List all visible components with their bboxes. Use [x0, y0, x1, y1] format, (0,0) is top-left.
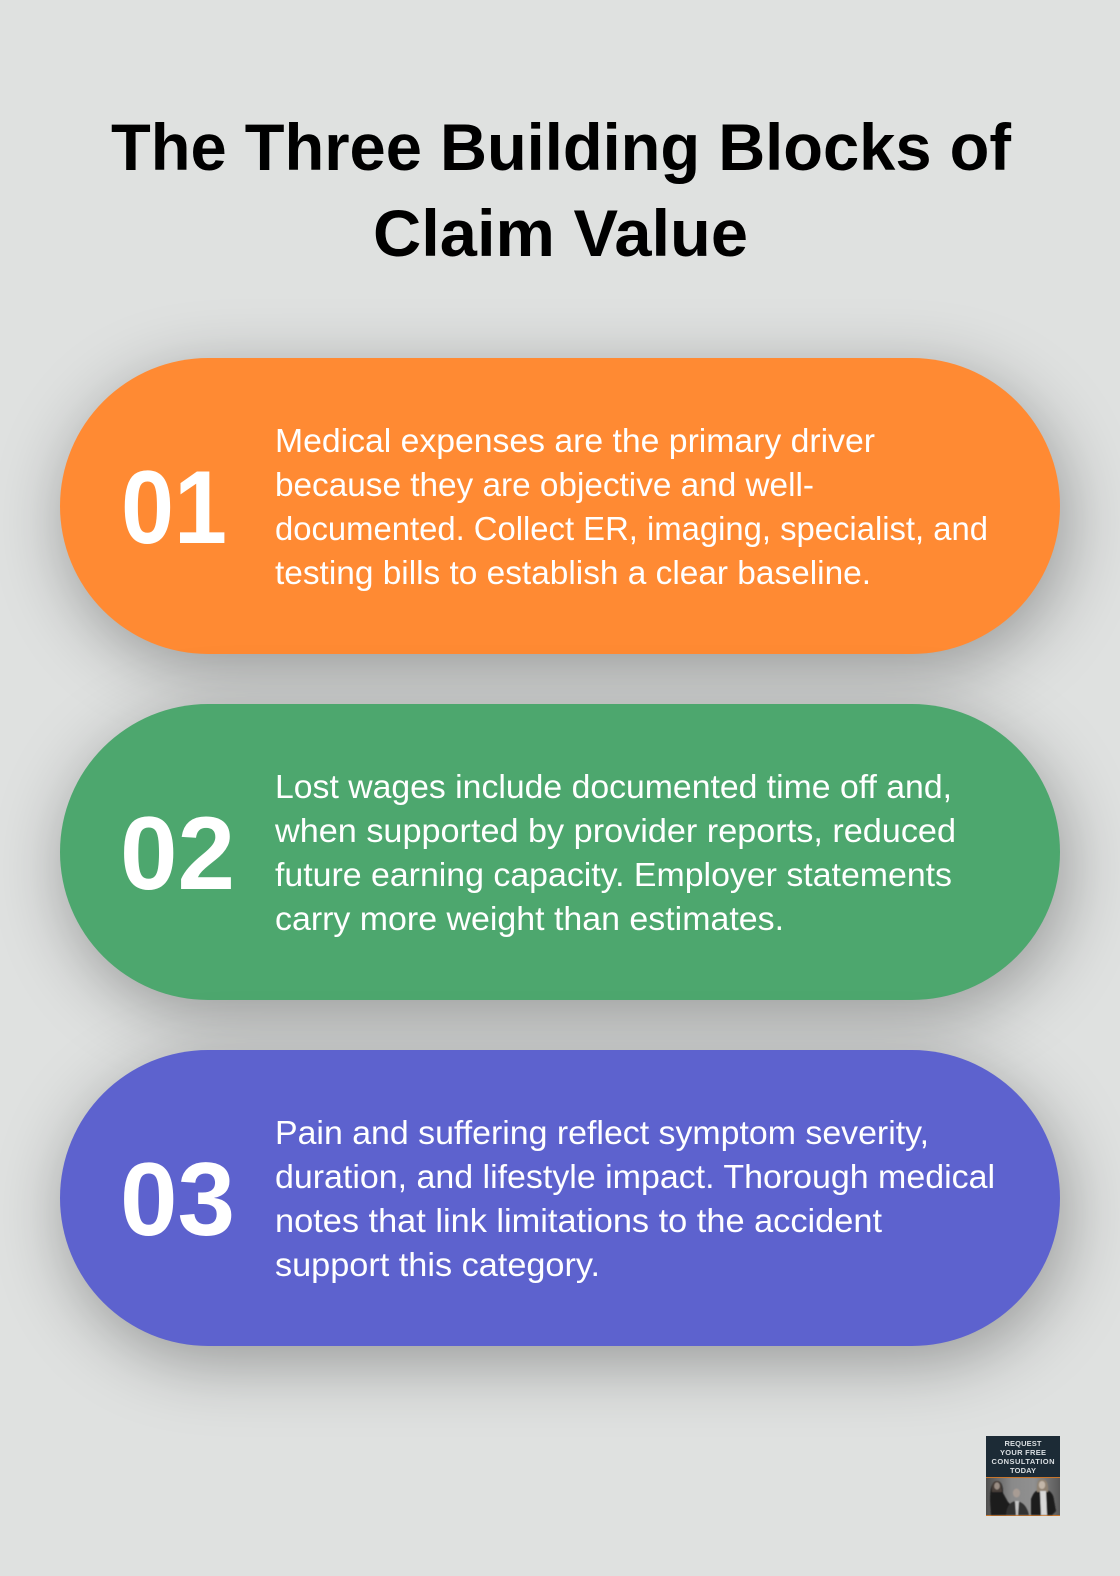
- text block: lost wages: future earning capacity. Employer statements: [275, 856, 952, 893]
- panel: step 02 lost wages: [60, 704, 1060, 1000]
- number 02: 02: [120, 796, 235, 912]
- number 01: 01: [121, 450, 227, 566]
- title: Claim Value: [373, 196, 748, 270]
- text block: medical expenses: because they are objective and well-: [275, 466, 814, 503]
- badge: request your free consultation: YOUR FREE: [1000, 1448, 1046, 1457]
- panel: step 01 medical expenses: [60, 358, 1060, 654]
- text block: medical expenses: documented. Collect ER, imaging, specialist, and: [275, 510, 988, 547]
- icon: three people portrait: [990, 1479, 1056, 1515]
- title: [111, 110, 1012, 270]
- text block: medical expenses: testing bills to establish a clear baseline.: [275, 554, 871, 591]
- text block: pain and suffering: [275, 1114, 995, 1283]
- panel: step 03 pain and suffering: [60, 1050, 1060, 1346]
- text block: pain and suffering: support this category.: [275, 1246, 600, 1283]
- badge: request your free consultation: [986, 1436, 1060, 1516]
- badge: request your free consultation: TODAY: [1010, 1466, 1036, 1475]
- text block: lost wages: Lost wages include documented time off and,: [275, 768, 952, 805]
- text block: pain and suffering: Pain and suffering reflect symptom severity,: [275, 1114, 929, 1151]
- number 03: 03: [120, 1142, 235, 1258]
- text block: pain and suffering: duration, and lifestyle impact. Thorough medical: [275, 1158, 995, 1195]
- text block: lost wages: when supported by provider reports, reduced: [274, 812, 956, 849]
- text block: lost wages: carry more weight than estimates.: [275, 900, 784, 937]
- badge: request your free consultation: CONSULTATION: [992, 1457, 1054, 1466]
- text block: lost wages: [274, 768, 956, 937]
- badge: request your free consultation: REQUEST: [1004, 1439, 1042, 1448]
- text block: medical expenses: Medical expenses are the primary driver: [275, 422, 875, 459]
- text block: pain and suffering: notes that link limitations to the accident: [275, 1202, 882, 1239]
- title: The Three Building Blocks of: [111, 110, 1012, 184]
- text block: medical expenses: [275, 422, 988, 591]
